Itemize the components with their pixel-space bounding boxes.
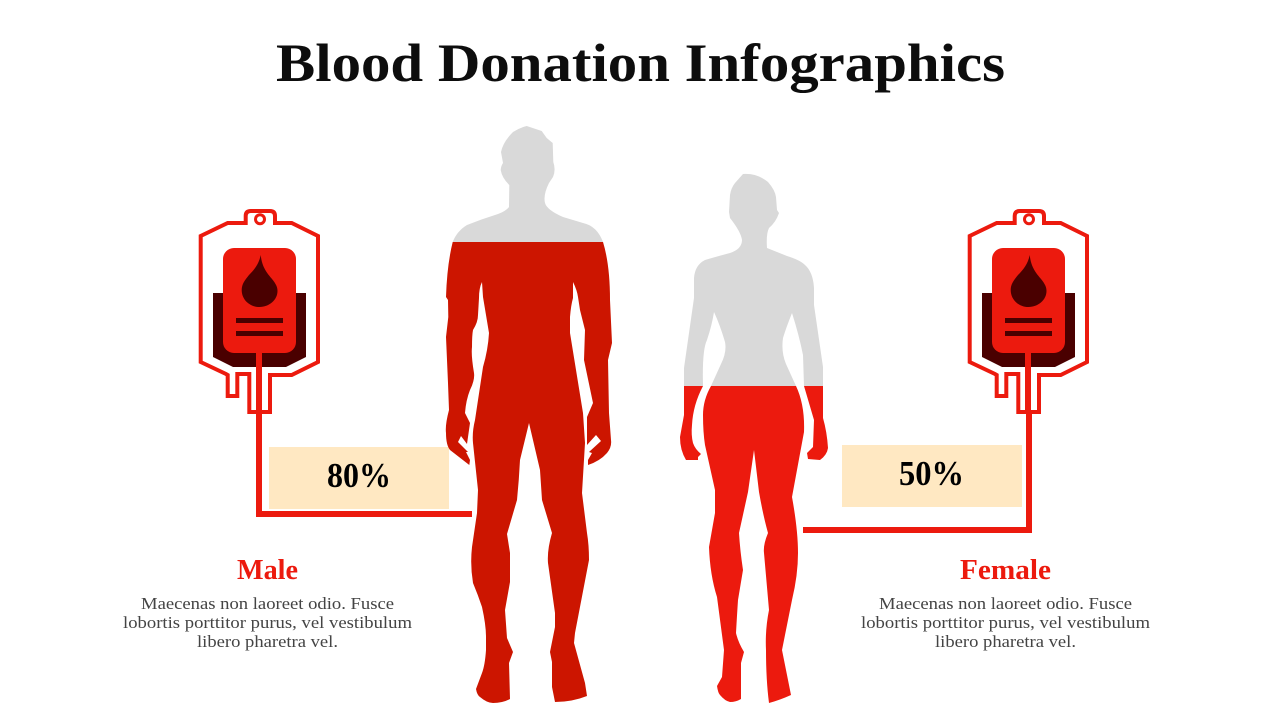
female percentage box: 50%: [899, 454, 964, 493]
male connector line: [259, 353, 472, 514]
female connector line: [803, 353, 1029, 530]
icon: female blood bag: [970, 211, 1087, 413]
female text block: libero pharetra vel.: [935, 632, 1076, 651]
icon: male blood bag: [201, 211, 318, 413]
male silhouette: [446, 126, 612, 703]
male text block: lobortis porttitor purus, vel vestibulum: [123, 613, 412, 632]
female silhouette: [680, 174, 828, 703]
male text block: [123, 555, 412, 651]
female percentage box: [842, 445, 1022, 507]
male text block: Maecenas non laoreet odio. Fusce: [141, 594, 394, 613]
male text block: libero pharetra vel.: [197, 632, 338, 651]
male percentage box: 80%: [327, 456, 391, 495]
male text block: Male: [237, 555, 298, 586]
female text block: lobortis porttitor purus, vel vestibulum: [861, 613, 1150, 632]
male percentage box: [269, 447, 449, 509]
female text block: Female: [960, 555, 1051, 586]
female text block: [861, 555, 1150, 651]
female text block: Maecenas non laoreet odio. Fusce: [879, 594, 1132, 613]
title: Blood Donation Infographics: [276, 33, 1005, 93]
